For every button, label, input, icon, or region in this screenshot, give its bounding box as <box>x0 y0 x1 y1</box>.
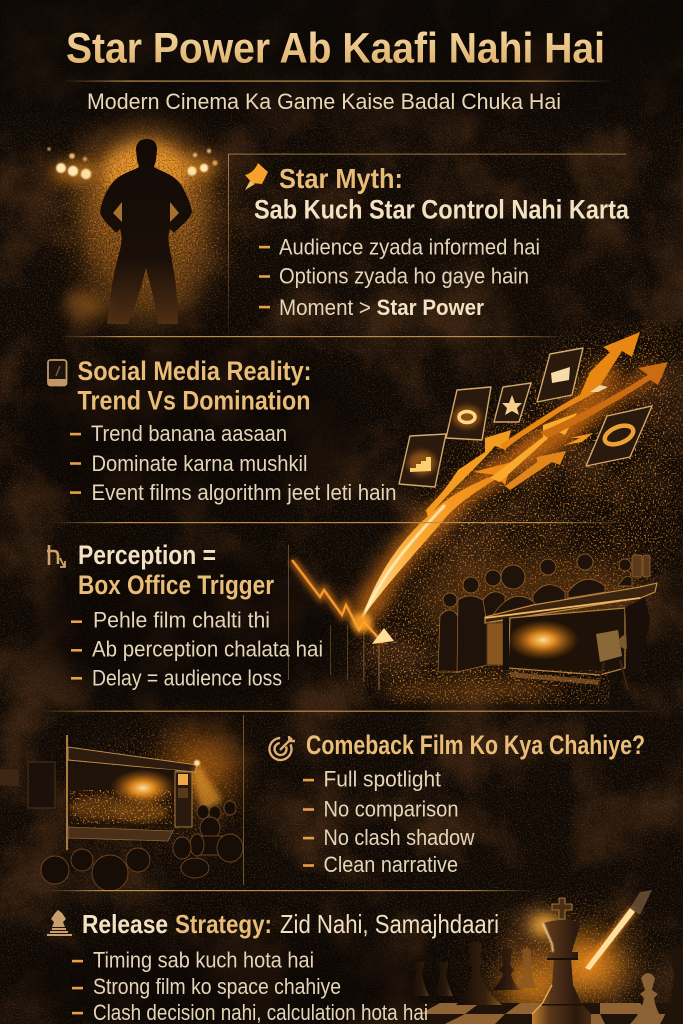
bullet list: Full spotlight <box>324 767 441 792</box>
icon: chess pawn on steps <box>47 910 72 936</box>
illustration: cinema screen with audience <box>0 715 244 891</box>
bullet list: Strong film ko space chahiye <box>93 974 341 999</box>
divider <box>40 711 660 712</box>
panel: release strategy: Strategy: <box>175 909 272 939</box>
icon: smartphone <box>48 360 66 386</box>
bullet list <box>70 421 396 505</box>
panel: social media reality: Trend Vs Domination <box>78 385 310 415</box>
heading: perception: Perception = <box>78 540 216 570</box>
illustration: chess king <box>400 890 683 1024</box>
chess board <box>400 1003 683 1024</box>
theatre screen <box>485 583 657 690</box>
bullet list: No clash shadow <box>324 825 475 850</box>
bullet list: Delay = audience loss <box>92 666 282 691</box>
divider <box>60 336 570 337</box>
arrow streaks <box>362 332 668 618</box>
panel: social media reality <box>48 356 396 505</box>
bullet list: Event films algorithm jeet leti hain <box>92 480 396 505</box>
king piece <box>532 898 591 1024</box>
bullet list: Ab perception chalata hai <box>92 637 323 662</box>
foreground pawns <box>630 947 683 1024</box>
bullet list: Trend banana aasaan <box>91 421 287 446</box>
bullet list <box>259 235 540 320</box>
icon: push pin <box>245 163 268 190</box>
panel: release strategy <box>47 909 499 1024</box>
title rule <box>62 80 614 82</box>
bullet list: Moment > Star Power <box>279 295 484 320</box>
heading: star myth: Star Myth: <box>279 163 403 194</box>
falling chart line <box>292 560 383 643</box>
bullet list: No comparison <box>324 797 458 822</box>
subtitle: Modern Cinema Ka Game Kaise Badal Chuka Hai <box>87 89 561 114</box>
audience silhouettes <box>41 801 243 891</box>
bullet list: Dominate karna mushkil <box>92 451 308 476</box>
bullet list: Audience zyada informed hai <box>279 235 540 260</box>
icon: target with arrow <box>266 734 295 764</box>
panel: perception <box>47 540 323 691</box>
panel: comeback film <box>266 730 645 877</box>
illustration: star silhouette with stage lights <box>20 120 270 340</box>
icon: phone cards <box>399 348 652 487</box>
panel: star myth <box>228 154 630 336</box>
title: Star Power Ab Kaafi Nahi Hai <box>66 24 605 72</box>
heading: social media: Social Media Reality: <box>78 356 312 386</box>
heading: release strategy: Release <box>82 909 168 939</box>
bullet list: Clean narrative <box>324 852 458 877</box>
illustration: rising social arrows and phones <box>330 320 683 700</box>
bullet list: Timing sab kuch hota hai <box>93 948 314 973</box>
light streak <box>587 910 633 967</box>
icon: perception graph <box>47 545 65 567</box>
panel: perception: Box Office Trigger <box>78 570 274 600</box>
divider <box>45 890 535 891</box>
divider <box>50 522 630 523</box>
bullet list <box>72 948 428 1024</box>
crowd silhouettes <box>438 554 650 672</box>
crowd glow <box>415 555 625 645</box>
illustration: falling chart and crowd at theatre <box>288 545 657 704</box>
bullet list <box>71 608 323 691</box>
bullet list: Options zyada ho gaye hain <box>279 264 529 289</box>
bullet list: Pehle film chalti thi <box>93 608 270 633</box>
bullet list <box>303 767 475 877</box>
background chess pieces <box>409 941 537 1005</box>
panel: release strategy: Zid Nahi, Samajhdaari <box>280 909 499 939</box>
subheading: Sab Kuch Star Control Nahi Karta <box>254 194 630 224</box>
